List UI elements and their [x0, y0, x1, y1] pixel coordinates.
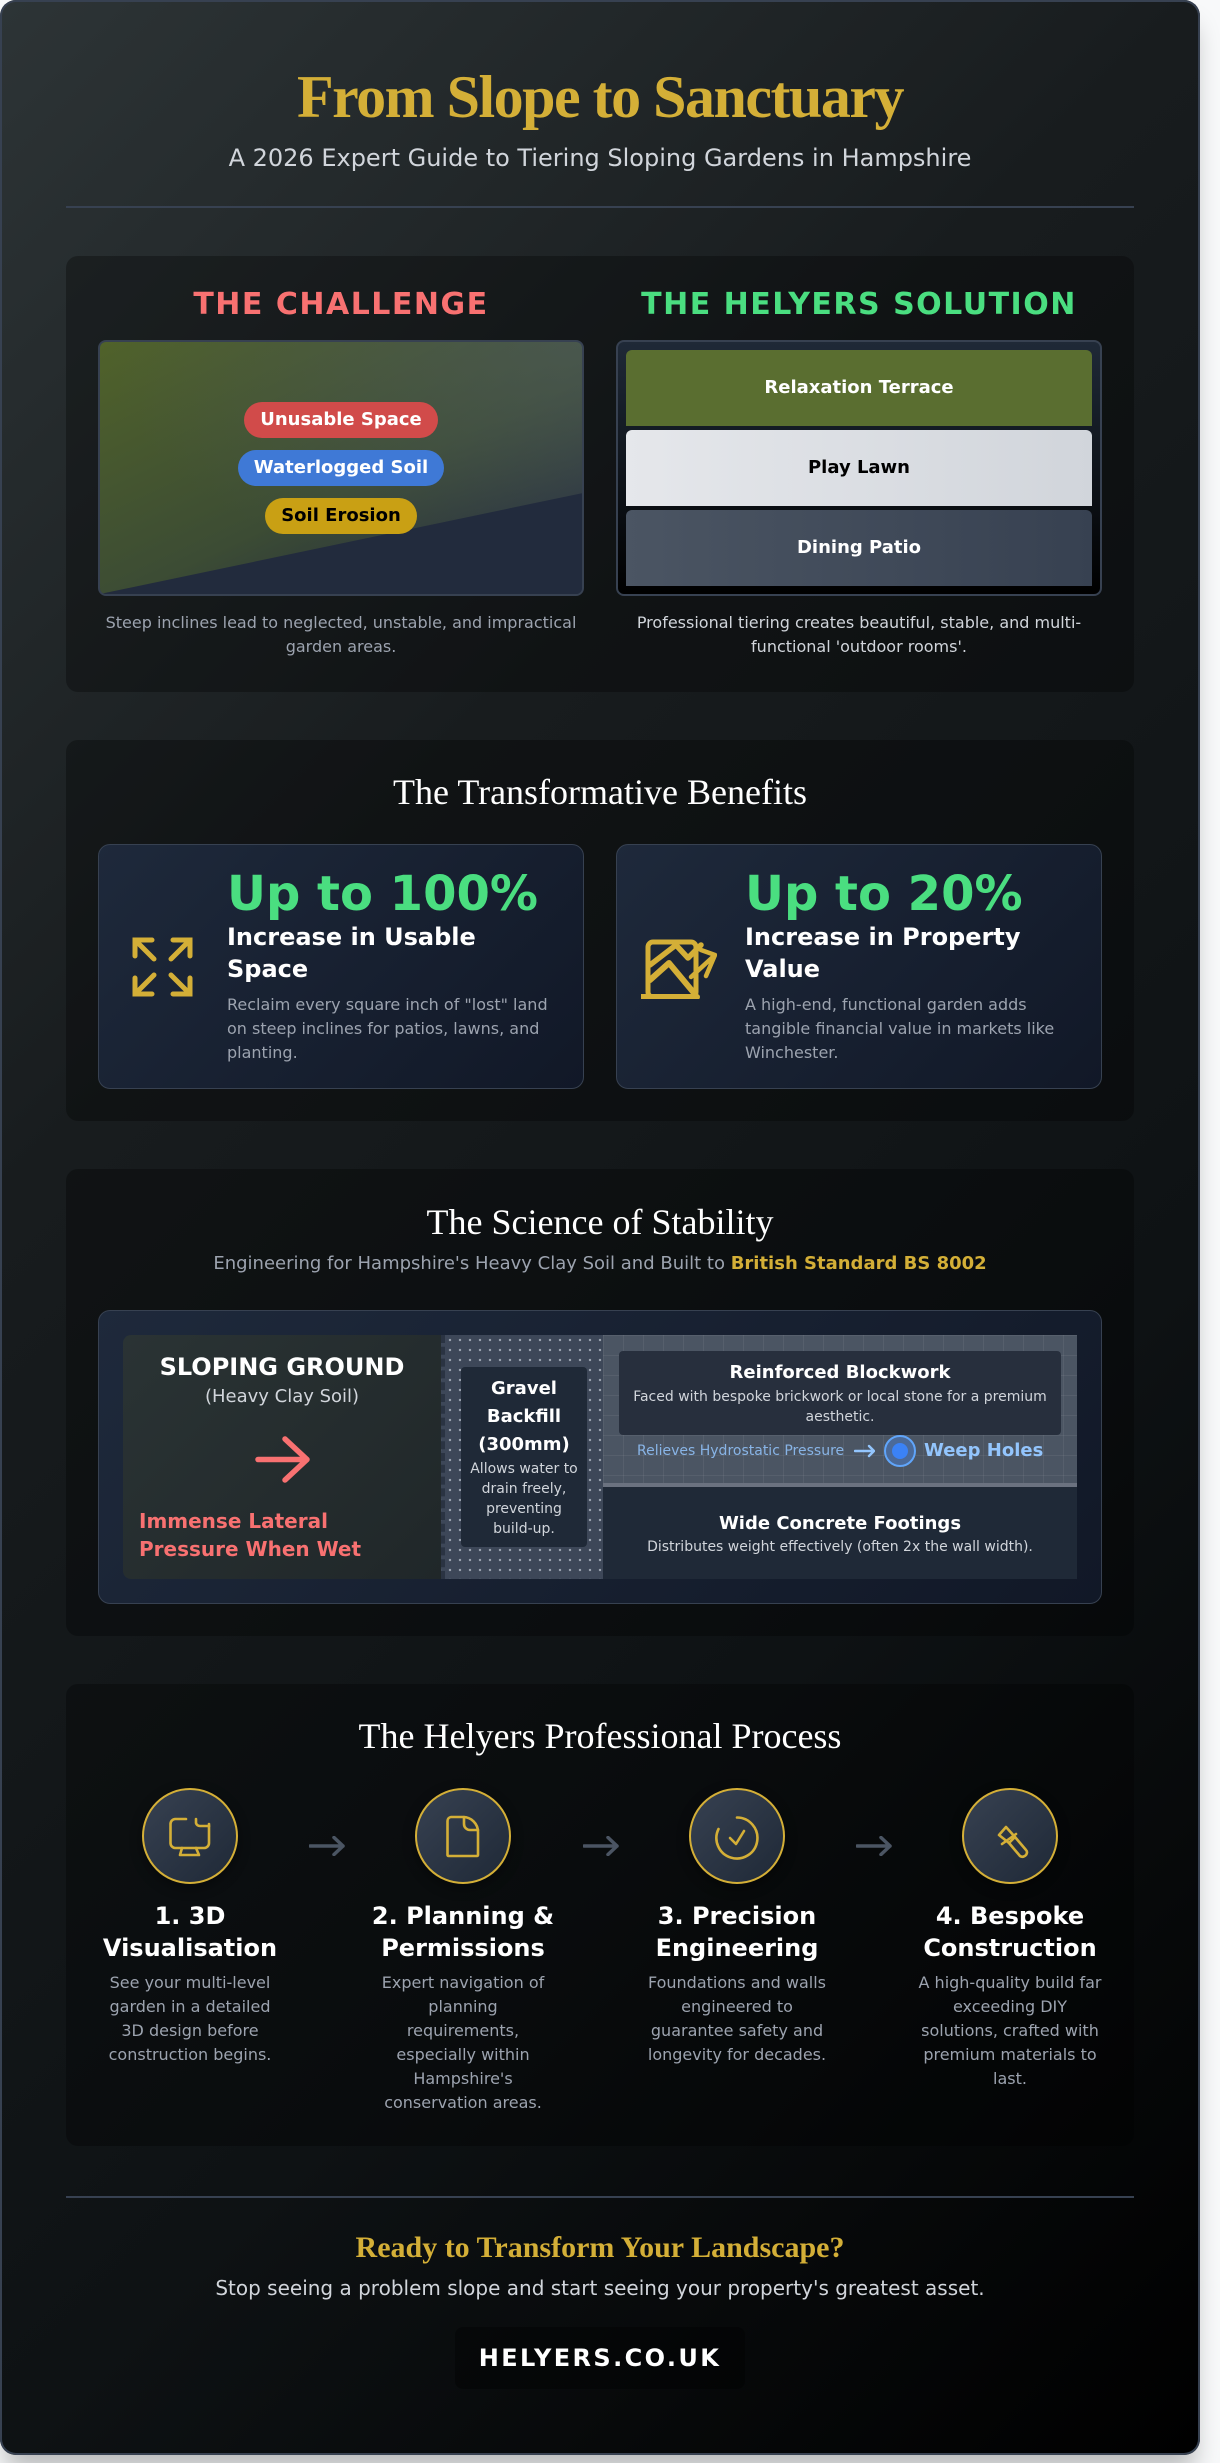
step text: planning [428, 1997, 498, 2016]
step title: Permissions [381, 1934, 545, 1962]
step title: 1. 3D [155, 1902, 225, 1930]
subheading: Engineering for Hampshire's Heavy Clay Soil and Built to British Standard BS 8002 [213, 1253, 987, 1274]
step title: 4. Bespoke [936, 1902, 1084, 1930]
tier: play lawn: Play Lawn [808, 457, 910, 478]
step text: exceeding DIY [953, 1997, 1067, 2016]
stat description: tangible financial value in markets like [745, 1019, 1054, 1038]
stat label [745, 923, 1020, 983]
heading: The Transformative Benefits [393, 772, 807, 812]
card: property value [616, 844, 1102, 1089]
heading: the challenge: THE CHALLENGE [193, 287, 489, 322]
tiered garden illustration [616, 340, 1102, 596]
gravel description: preventing [486, 1501, 562, 1517]
label: pressure [139, 1509, 361, 1561]
footing description: Distributes weight effectively (often 2x the wall width). [647, 1539, 1033, 1555]
icon: value chart [641, 940, 717, 999]
step text: requirements, [407, 2021, 519, 2040]
step text: premium materials to [923, 2045, 1097, 2064]
stat description: planting. [227, 1043, 298, 1062]
icon: check circle [689, 1788, 785, 1884]
title: From Slope to Sanctuary [297, 64, 903, 130]
step text [382, 1973, 545, 2112]
step 4 [918, 1788, 1102, 2088]
pill: unusable space: Unusable Space [260, 409, 422, 430]
panel: process [66, 1684, 1134, 2146]
step text: conservation areas. [384, 2093, 542, 2112]
blockwork description: Faced with bespoke brickwork or local stone for a premium [633, 1389, 1047, 1405]
pill: unusable space [244, 402, 438, 438]
step title: Construction [923, 1934, 1097, 1962]
step text: last. [993, 2069, 1027, 2088]
step text: 3D design before [121, 2021, 259, 2040]
tier: dining patio [626, 510, 1092, 586]
solution description [637, 613, 1081, 656]
step title: 3. Precision [658, 1902, 816, 1930]
step text: solutions, crafted with [921, 2021, 1099, 2040]
tier: dining patio: Dining Patio [797, 537, 921, 558]
stat description [227, 995, 548, 1062]
gravel description: Allows water to [470, 1461, 578, 1477]
stat description: A high-end, functional garden adds [745, 995, 1027, 1014]
arrow [856, 1836, 892, 1856]
step 1 [103, 1788, 277, 2064]
step text: A high-quality build far [919, 1973, 1101, 1992]
step 3 [648, 1788, 826, 2064]
challenge description [106, 613, 576, 656]
panel: benefits [66, 740, 1134, 1121]
step text: garden in a detailed [109, 1997, 270, 2016]
label: heavy clay soil: (Heavy Clay Soil) [205, 1386, 359, 1407]
pill: waterlogged soil [238, 450, 444, 486]
tier: relaxation terrace: Relaxation Terrace [764, 377, 954, 398]
step title [923, 1902, 1097, 1962]
tier: relaxation terrace [626, 350, 1092, 426]
arrow [309, 1836, 345, 1856]
solution description: functional 'outdoor rooms'. [751, 637, 967, 656]
stat description: Winchester. [745, 1043, 838, 1062]
heading: the helyers solution: THE HELYERS SOLUTION [641, 287, 1077, 322]
gravel description [470, 1461, 578, 1537]
label: pressure: Immense Lateral [139, 1509, 328, 1533]
step text: Expert navigation of [382, 1973, 544, 1992]
blockwork description: aesthetic. [806, 1409, 874, 1425]
stat label: Space [227, 955, 308, 983]
gravel title: Backfill [487, 1406, 561, 1427]
icon: expand arrows [132, 938, 192, 996]
step title [656, 1902, 818, 1962]
card: usable space [98, 844, 584, 1089]
gravel title [478, 1378, 570, 1455]
arrow: lateral pressure [255, 1436, 310, 1483]
step 2 [372, 1788, 554, 2112]
cta text: Stop seeing a problem slope and start seeing your property's greatest asset. [215, 2276, 985, 2300]
panel: science of stability [66, 1169, 1134, 1636]
challenge description: Steep inclines lead to neglected, unstable, and impractical [106, 613, 576, 632]
stat description: on steep inclines for patios, lawns, and [227, 1019, 539, 1038]
blockwork title: Reinforced Blockwork [730, 1362, 950, 1383]
stat: Up to 100% [227, 866, 538, 922]
arrow [583, 1836, 619, 1856]
solution description: Professional tiering creates beautiful, stable, and multi- [637, 613, 1081, 632]
step text: Hampshire's [413, 2069, 513, 2088]
heading: The Helyers Professional Process [359, 1716, 841, 1756]
panel: challenge and solution [66, 256, 1134, 692]
blockwork description [633, 1389, 1047, 1425]
pill: soil erosion [265, 498, 417, 534]
gravel title: Gravel [491, 1378, 557, 1399]
stat label: Increase in Property [745, 923, 1020, 951]
label: hydrostatic pressure: Relieves Hydrostatic Pressure [637, 1443, 844, 1459]
icon: tool [962, 1788, 1058, 1884]
pill: soil erosion: Soil Erosion [281, 505, 401, 526]
gravel label box [461, 1367, 587, 1547]
label: pressure: Pressure When Wet [139, 1537, 361, 1561]
website button [455, 2327, 745, 2389]
icon: weep hole [884, 1435, 916, 1467]
step title: 2. Planning & [372, 1902, 554, 1930]
subtitle: A 2026 Expert Guide to Tiering Sloping Gardens in Hampshire [229, 144, 971, 172]
stat label: Increase in Usable [227, 923, 476, 951]
website button: HELYERS.CO.UK [479, 2344, 721, 2372]
cta heading: Ready to Transform Your Landscape? [356, 2231, 844, 2264]
step text [648, 1973, 826, 2064]
stat description [745, 995, 1054, 1062]
sloped garden illustration [98, 340, 584, 596]
step title [103, 1902, 277, 1962]
icon: document [415, 1788, 511, 1884]
step text: longevity for decades. [648, 2045, 826, 2064]
step text [109, 1973, 271, 2064]
label: sloping ground: SLOPING GROUND [160, 1353, 404, 1381]
blockwork wall section [603, 1335, 1077, 1483]
icon: monitor [142, 1788, 238, 1884]
arrow: to weep holes [854, 1444, 875, 1458]
stat: Up to 20% [745, 866, 1023, 922]
step text: engineered to [681, 1997, 793, 2016]
pill: waterlogged soil: Waterlogged Soil [254, 457, 428, 478]
stat label [227, 923, 476, 983]
step title [372, 1902, 554, 1962]
challenge description: garden areas. [286, 637, 396, 656]
step title: Engineering [656, 1934, 818, 1962]
step text: guarantee safety and [651, 2021, 823, 2040]
gravel title: (300mm) [478, 1434, 570, 1455]
stat description: Reclaim every square inch of "lost" land [227, 995, 548, 1014]
retaining wall diagram [98, 1310, 1102, 1604]
footing title: Wide Concrete Footings [719, 1513, 961, 1534]
heading: The Science of Stability [427, 1202, 773, 1242]
sloping ground section [123, 1335, 441, 1579]
step text: especially within [396, 2045, 530, 2064]
step title: Visualisation [103, 1934, 277, 1962]
blockwork label [619, 1351, 1061, 1435]
footer call to action [215, 2231, 985, 2372]
label: weep holes: Weep Holes [924, 1440, 1043, 1461]
gravel backfill section [441, 1335, 603, 1579]
step text: construction begins. [109, 2045, 271, 2064]
gravel description: drain freely, [482, 1481, 566, 1497]
step text: See your multi-level [110, 1973, 270, 1992]
header [228, 64, 971, 172]
gravel description: build-up. [493, 1521, 555, 1537]
tier: play lawn [626, 430, 1092, 506]
footing section [603, 1487, 1077, 1579]
step text: Foundations and walls [648, 1973, 826, 1992]
step text [918, 1973, 1102, 2088]
stat label: Value [745, 955, 820, 983]
